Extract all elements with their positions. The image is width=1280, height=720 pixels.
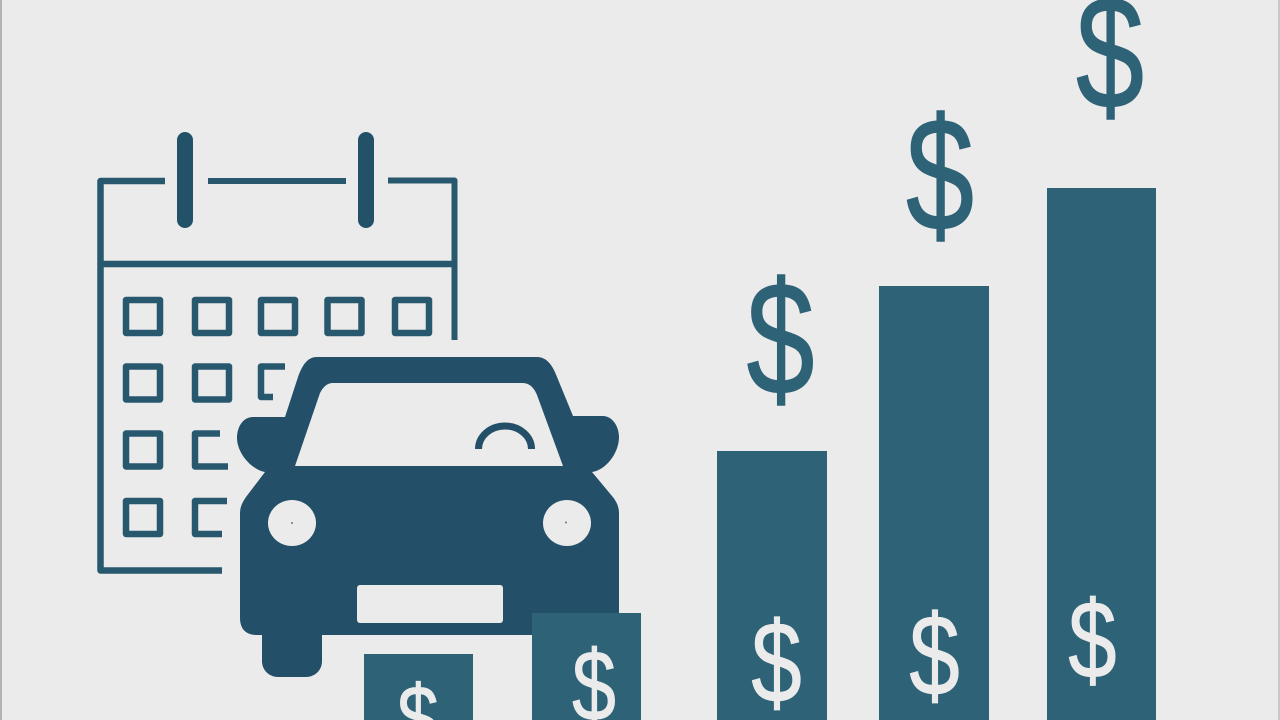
bar 4: $: [909, 592, 959, 720]
bar 5: [1047, 188, 1156, 720]
dollar sign above bar 3: $: [746, 250, 815, 429]
bar 5: $: [1068, 579, 1117, 702]
bar 3: [717, 451, 827, 720]
headlight right: [543, 500, 591, 546]
dollar sign above bar 4: $: [906, 86, 974, 265]
bar chart: [364, 188, 1156, 720]
bar 4: [879, 286, 989, 720]
icon: car: [237, 357, 619, 677]
bar 2: [532, 613, 641, 720]
bar 1: [364, 654, 473, 720]
wheel: [262, 630, 322, 677]
icon: calendar: [100, 132, 455, 570]
license plate: [357, 585, 503, 623]
windshield: [295, 383, 563, 466]
mirror arc: [478, 426, 532, 449]
headlight left: [268, 500, 316, 546]
